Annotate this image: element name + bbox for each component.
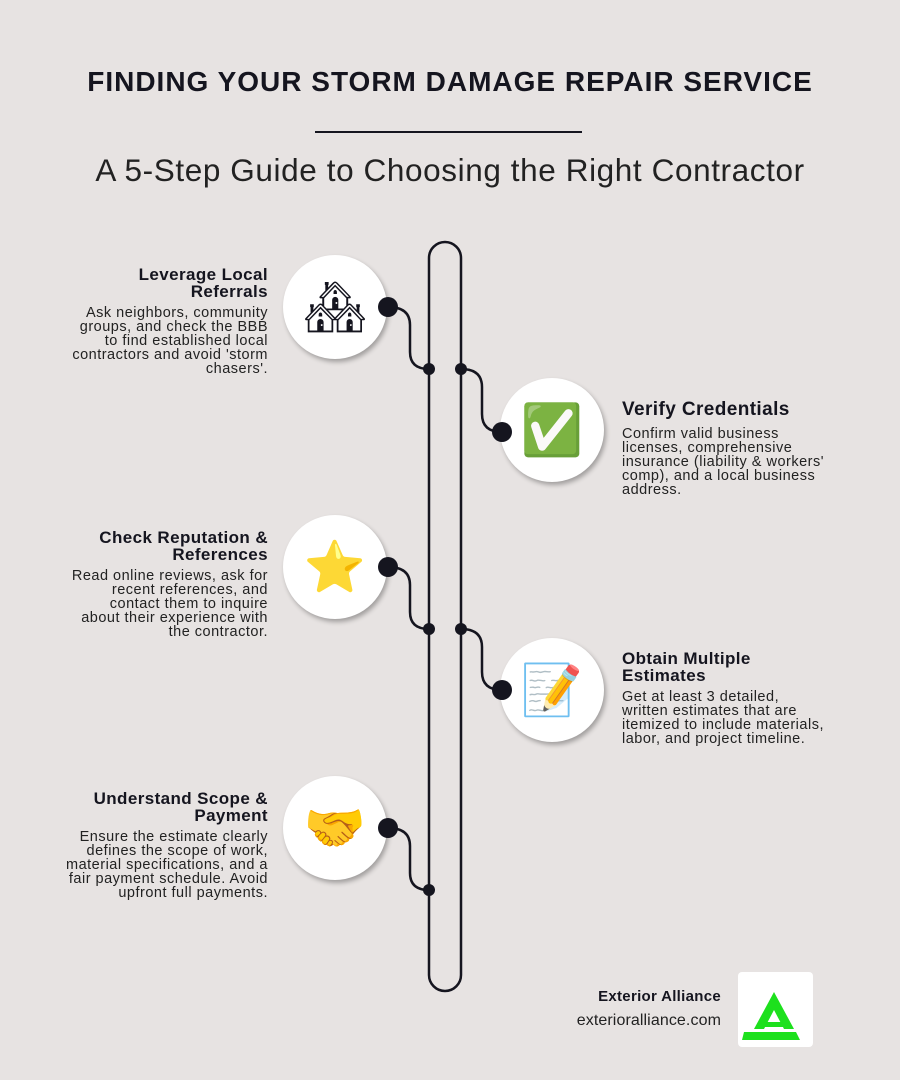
step 3 text: about their experience with xyxy=(81,610,268,626)
icon: star: ⭐ xyxy=(304,538,366,596)
step 3 text: References xyxy=(172,545,268,564)
step 2 text: licenses, comprehensive xyxy=(622,440,792,456)
step 5 text: defines the scope of work, xyxy=(87,843,268,859)
step 4 text: Estimates xyxy=(622,666,706,685)
step 5 text: material specifications, and a xyxy=(66,857,268,873)
step 3 text: Check Reputation & xyxy=(99,528,268,547)
icon: check: ✅ xyxy=(521,400,583,458)
step 5 text: Ensure the estimate clearly xyxy=(80,829,268,845)
step 3 text: recent references, and xyxy=(112,582,268,598)
footer brand: Exterior Alliance xyxy=(598,988,721,1005)
logo xyxy=(738,972,813,1047)
step 4 text: labor, and project timeline. xyxy=(622,731,805,747)
step 4 text: written estimates that are xyxy=(622,703,797,719)
step 1 text: chasers'. xyxy=(206,361,268,377)
step 1 text xyxy=(72,265,268,377)
step 4 text xyxy=(622,649,824,747)
step 5 text: Payment xyxy=(194,806,268,825)
step 1 text: Leverage Local xyxy=(139,265,268,284)
step 2 text: insurance (liability & workers' xyxy=(622,454,824,470)
step 1 text: to find established local xyxy=(105,333,268,349)
step 5 text: Understand Scope & xyxy=(94,789,268,808)
icon: handshake: 🤝 xyxy=(304,798,366,856)
step 2 text xyxy=(622,399,824,498)
step 2 text: address. xyxy=(622,482,682,498)
step 1 text: contractors and avoid 'storm xyxy=(72,347,268,363)
step 4 text: itemized to include materials, xyxy=(622,717,824,733)
step 3 text: Read online reviews, ask for xyxy=(72,568,268,584)
step 3 text xyxy=(72,528,268,640)
step 4 text: Get at least 3 detailed, xyxy=(622,689,779,705)
step 5 text: fair payment schedule. Avoid xyxy=(69,871,268,887)
icon: check xyxy=(500,378,604,482)
step 4 text: Obtain Multiple xyxy=(622,649,751,668)
step 3 text: the contractor. xyxy=(169,624,268,640)
step 1 text: Ask neighbors, community xyxy=(86,305,268,321)
icon: memo xyxy=(500,638,604,742)
step 3 text: contact them to inquire xyxy=(110,596,268,612)
step 2 text: comp), and a local business xyxy=(622,468,815,484)
title: FINDING YOUR STORM DAMAGE REPAIR SERVICE xyxy=(87,66,813,97)
icon: memo: 📝 xyxy=(521,660,583,718)
step 5 text xyxy=(66,789,268,901)
step 1 text: groups, and check the BBB xyxy=(80,319,268,335)
footer brand xyxy=(577,988,721,1029)
footer brand: exterioralliance.com xyxy=(577,1012,721,1029)
step 5 text: upfront full payments. xyxy=(118,885,268,901)
icon: houses xyxy=(283,255,387,359)
icon: handshake xyxy=(283,776,387,880)
subtitle: A 5-Step Guide to Choosing the Right Contractor xyxy=(95,152,805,188)
icon: houses: 🏘 xyxy=(303,278,367,336)
step 2 text: Confirm valid business xyxy=(622,426,779,442)
step 1 text: Referrals xyxy=(191,282,268,301)
step 2 text: Verify Credentials xyxy=(622,399,790,420)
icon: star xyxy=(283,515,387,619)
